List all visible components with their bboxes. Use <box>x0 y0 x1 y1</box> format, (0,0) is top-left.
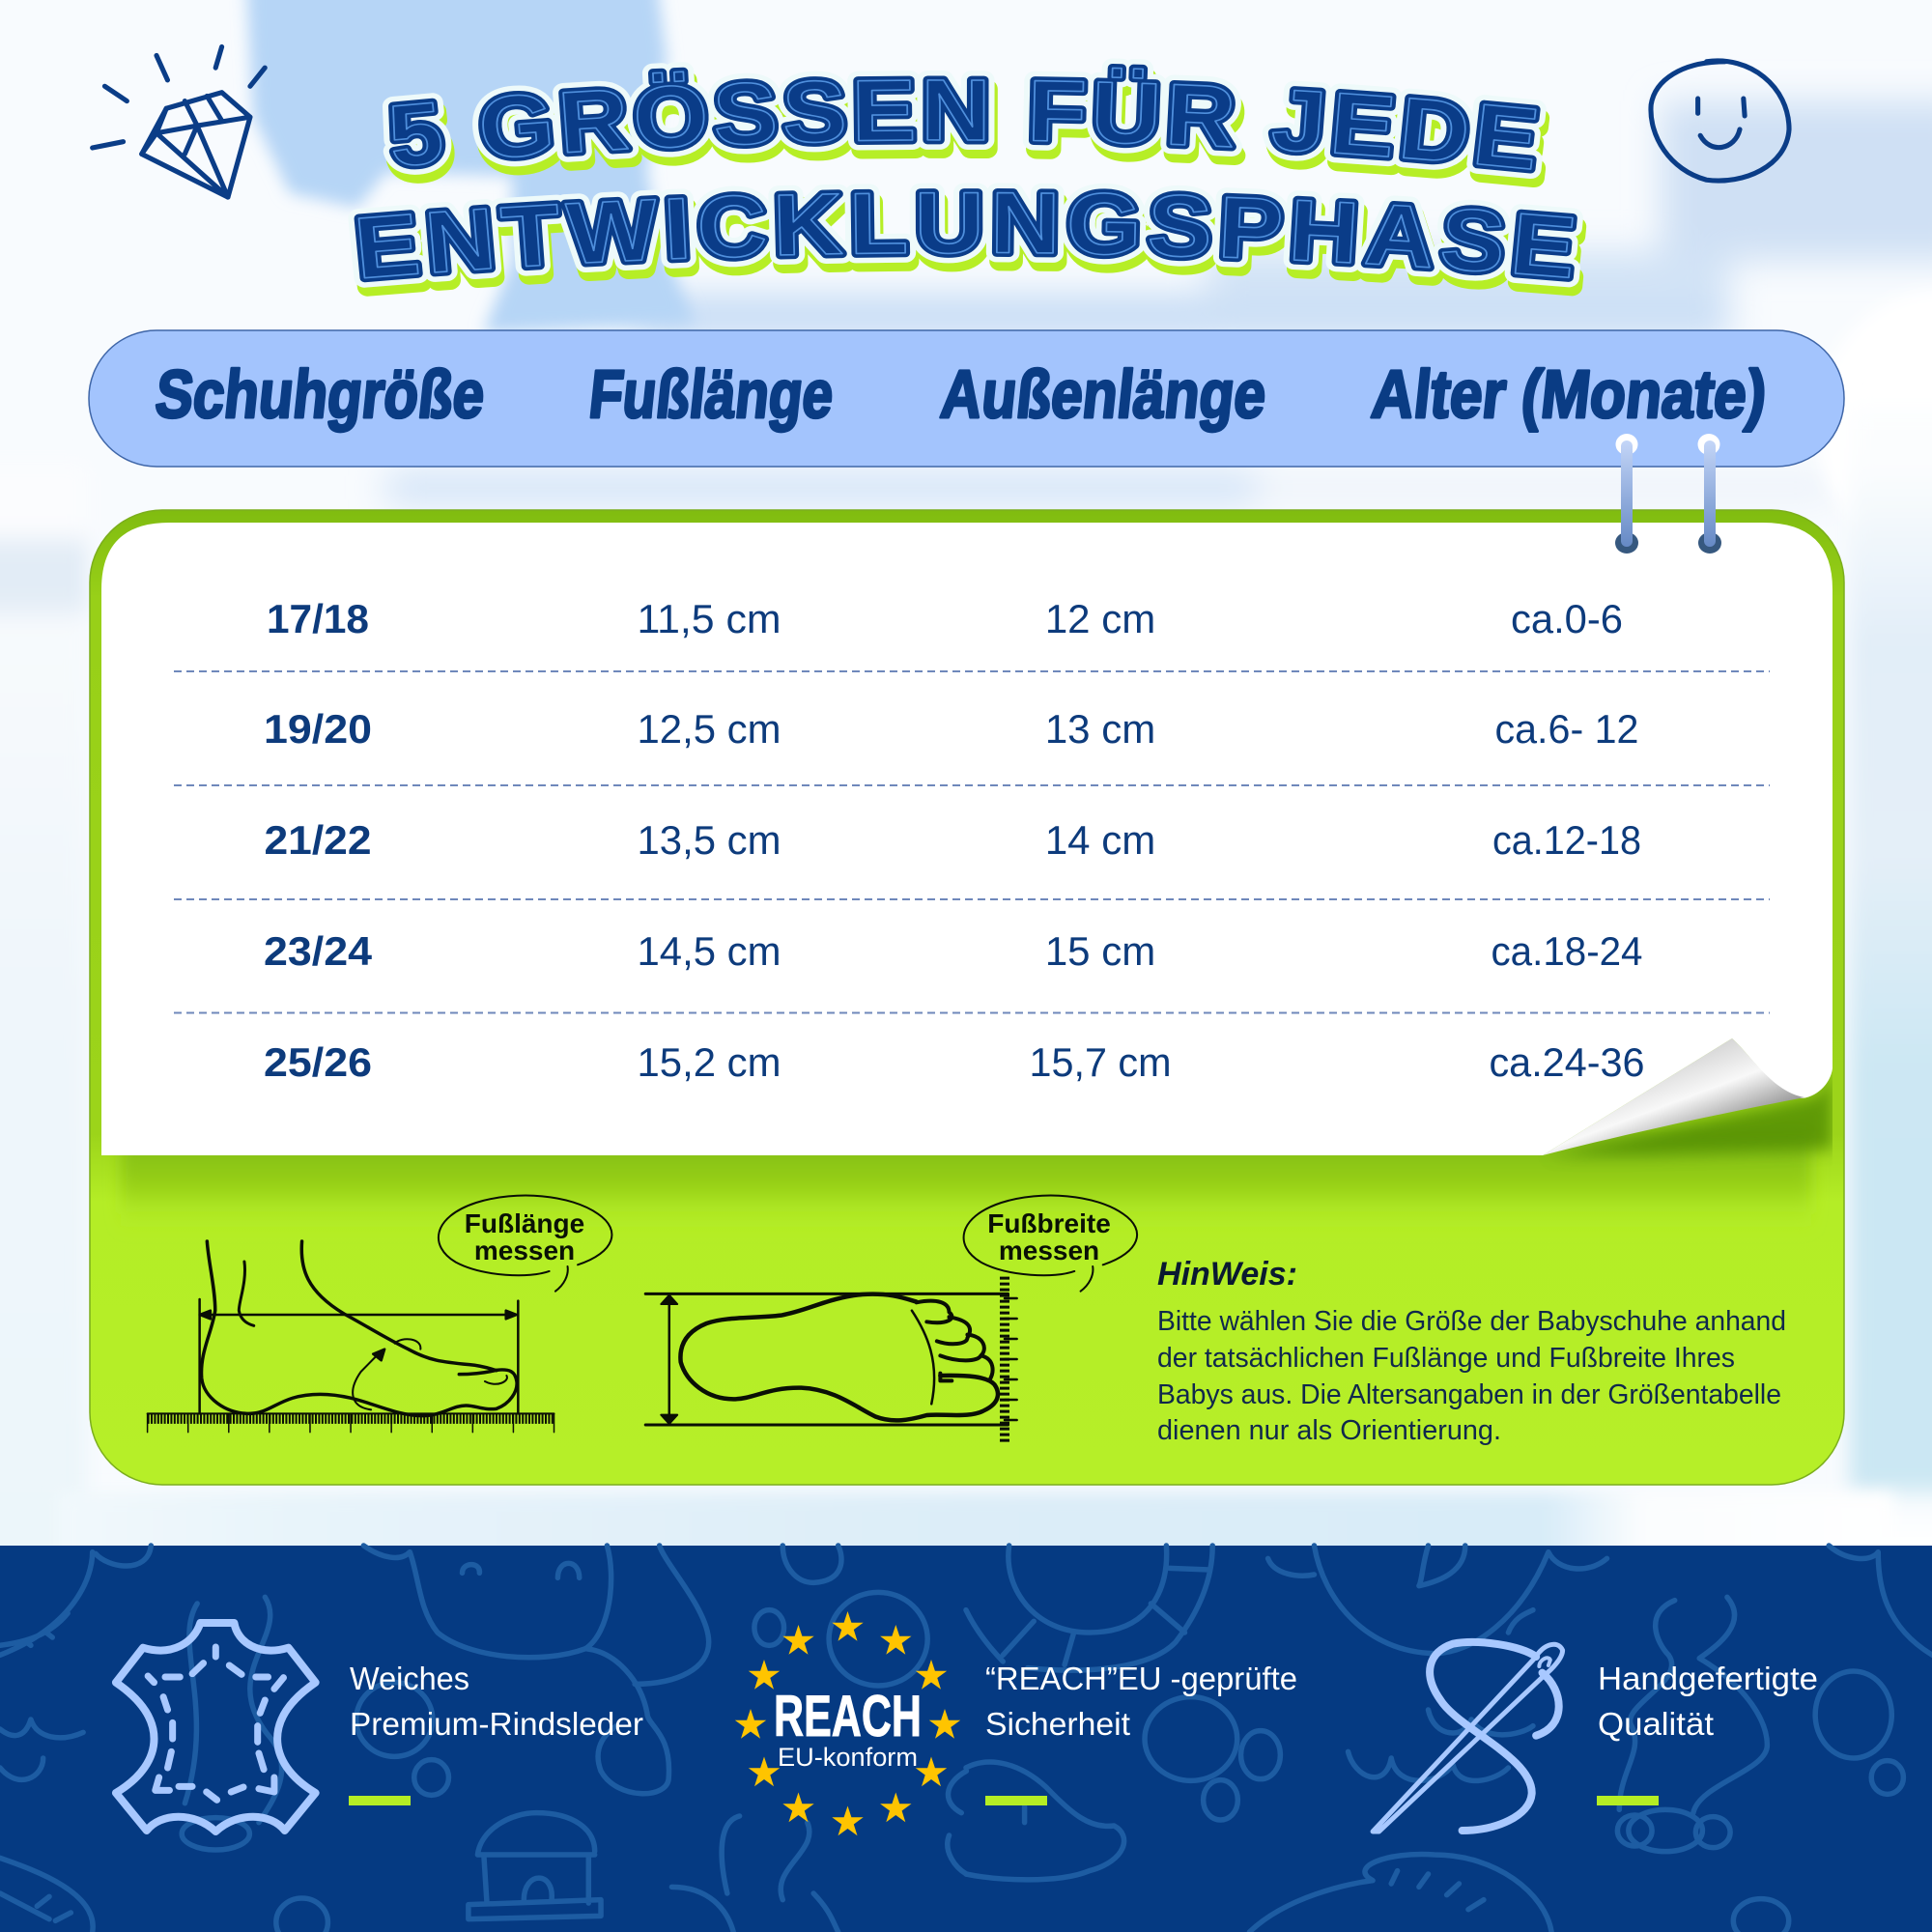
text: REACH EU geprüfte Sicherheit: Sicherheit <box>985 1706 1130 1742</box>
label: Fußlänge messen: messen <box>474 1236 575 1265</box>
title: ENTWICKLUNGSPHASE <box>357 195 1586 297</box>
row 19/20: 13 cm <box>1045 706 1155 752</box>
panel: navy footer band <box>0 1546 1932 1932</box>
label: Fußbreite messen <box>987 1208 1111 1265</box>
row 21/22: ca.12-18 <box>1492 817 1641 863</box>
text: REACH EU geprüfte Sicherheit: “REACH”EU -geprüfte <box>985 1661 1297 1696</box>
row 21/22: 13,5 cm <box>638 817 781 863</box>
icon: leather hide <box>116 1623 316 1832</box>
text block: hint: dienen nur als Orientierung. <box>1157 1415 1501 1446</box>
text block: hint: HinWeis: <box>1157 1256 1297 1293</box>
text: REACH EU geprüfte Sicherheit <box>985 1661 1297 1805</box>
icon: REACH EU badge: EU-konform <box>778 1743 918 1772</box>
text block: hint <box>1157 1256 1786 1446</box>
title: ENTWICKLUNGSPHASE <box>349 184 1583 288</box>
speech bubble outline <box>439 1196 611 1292</box>
icon: smiley doodle <box>1651 61 1789 181</box>
speech bubble outline <box>964 1196 1137 1292</box>
heading: Fußlänge: Fußlänge <box>585 355 838 432</box>
label: Fußlänge messen: Fußlänge <box>465 1208 584 1238</box>
text: Handgefertigte Qualität: Qualität <box>1598 1706 1714 1742</box>
row 17/18 <box>267 596 1623 641</box>
text: Weiches Premium-Rindsleder: Premium-Rindsleder <box>350 1706 643 1742</box>
row 17/18: 17/18 <box>267 596 369 641</box>
panel: white paper sheet <box>101 523 1833 1155</box>
row 23/24: ca.18-24 <box>1492 928 1642 974</box>
panel: green sizing panel <box>90 510 1844 1485</box>
row 25/26: 15,2 cm <box>638 1039 781 1085</box>
row 25/26 <box>264 1039 1644 1085</box>
row 19/20: 19/20 <box>264 706 372 752</box>
text block: hint: der tatsächlichen Fußlänge und Fußbreite Ihres <box>1157 1343 1735 1374</box>
diagram: foot width top view <box>645 1196 1137 1442</box>
title: 5 GRÖSSEN FÜR JEDE <box>386 71 1549 187</box>
title: 5 GRÖSSEN FÜR JEDE <box>388 64 1541 174</box>
label: Fußlänge messen <box>465 1208 584 1265</box>
row 19/20 <box>264 706 1638 752</box>
row 23/24: 23/24 <box>264 928 373 974</box>
text: Handgefertigte Qualität <box>1597 1661 1818 1805</box>
icon: diamond doodle <box>93 46 265 197</box>
heading: Alter (Monate): Alter (Monate) <box>1368 355 1771 432</box>
row 21/22: 14 cm <box>1045 817 1155 863</box>
icon: needle and thread <box>1373 1642 1563 1832</box>
panel: table header bar <box>89 330 1844 467</box>
row 17/18: ca.0-6 <box>1511 596 1623 641</box>
row 21/22 <box>265 817 1641 863</box>
row 19/20: ca.6- 12 <box>1495 706 1638 752</box>
text: Weiches Premium-Rindsleder: Weiches <box>350 1661 469 1696</box>
row 17/18: 12 cm <box>1045 596 1155 641</box>
row 23/24: 15 cm <box>1045 928 1155 974</box>
row 23/24 <box>264 928 1642 974</box>
heading: Außenlänge: Außenlänge <box>937 355 1270 432</box>
row 23/24: 14,5 cm <box>638 928 781 974</box>
row 25/26: 15,7 cm <box>1030 1039 1171 1085</box>
title: ENTWICKLUNGSPHASE <box>357 191 1574 278</box>
title: ENTWICKLUNGSPHASE <box>354 188 1577 282</box>
text: Weiches Premium-Rindsleder <box>349 1661 643 1805</box>
row 25/26: 25/26 <box>264 1039 372 1085</box>
table rows <box>174 596 1770 1085</box>
icon: REACH EU badge <box>735 1611 960 1835</box>
title: 5 GRÖSSEN FÜR JEDE <box>383 58 1547 179</box>
binder rings <box>1615 434 1721 554</box>
heading: Schuhgröße: Schuhgröße <box>152 355 489 432</box>
title: 5 GRÖSSEN FÜR JEDE <box>392 68 1536 170</box>
text block: hint: Bitte wählen Sie die Größe der Babyschuhe anhand <box>1157 1306 1786 1337</box>
diagram: foot length side view <box>148 1196 611 1433</box>
row 19/20: 12,5 cm <box>638 706 781 752</box>
text block: hint: Babys aus. Die Altersangaben in der Größentabelle <box>1157 1379 1781 1410</box>
title <box>349 58 1586 297</box>
row 21/22: 21/22 <box>265 817 371 863</box>
paper curl <box>1543 1038 1804 1155</box>
text: Handgefertigte Qualität: Handgefertigte <box>1598 1661 1818 1696</box>
label: Fußbreite messen: messen <box>999 1236 1099 1265</box>
icon: REACH EU badge: REACH <box>774 1684 922 1748</box>
row 17/18: 11,5 cm <box>638 596 781 641</box>
row 25/26: ca.24-36 <box>1490 1039 1644 1085</box>
label: Fußbreite messen: Fußbreite <box>987 1208 1111 1238</box>
